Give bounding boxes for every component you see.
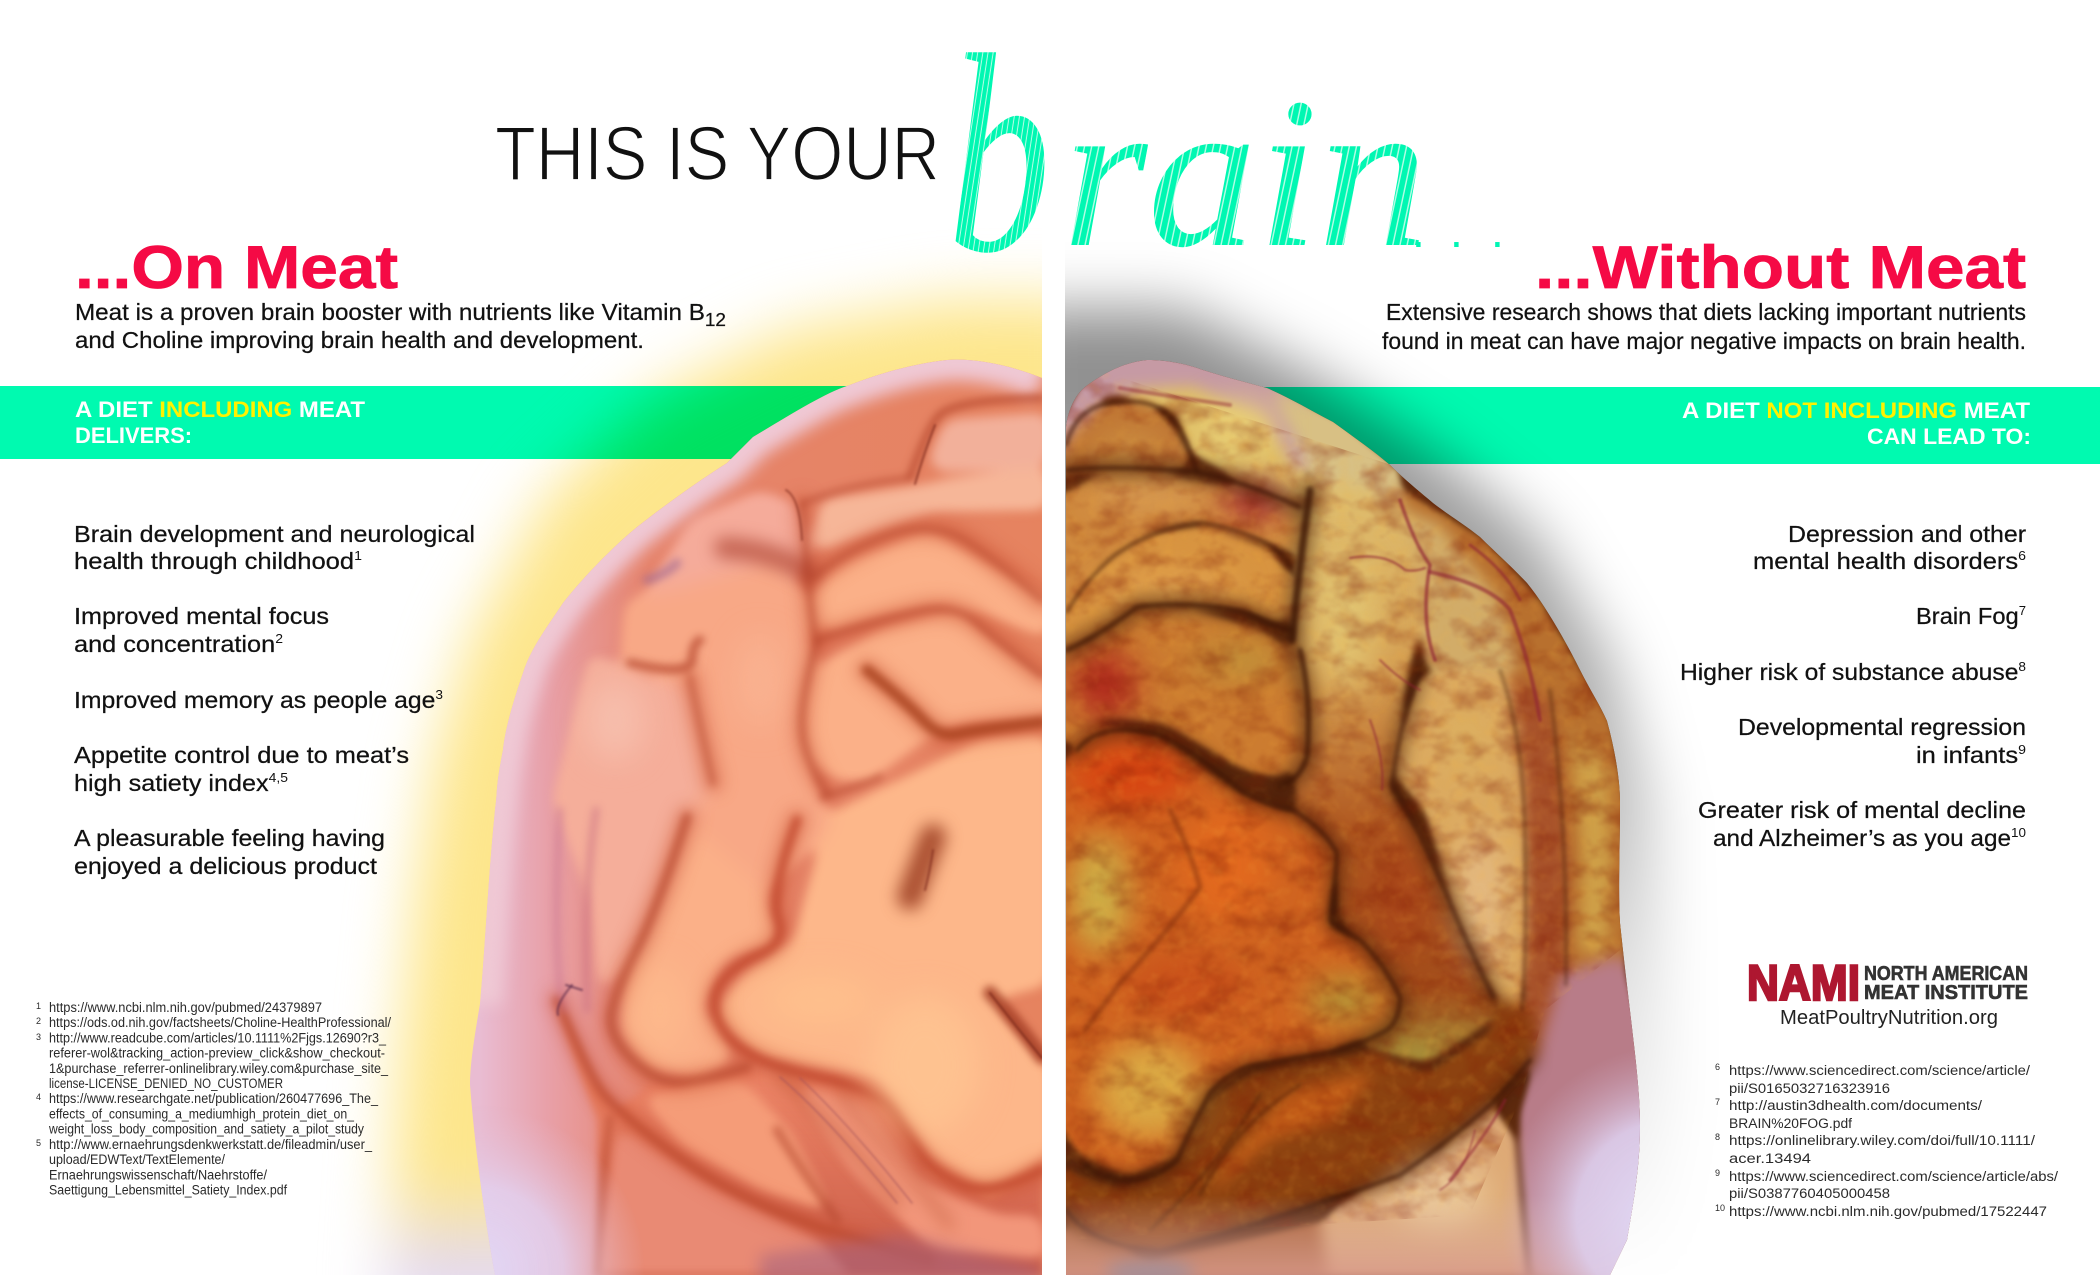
benefit: mental focus: Improved mental focus [74, 603, 329, 629]
footnotes: right: https://www.sciencedirect.com/science/article/abs/ [1729, 1169, 2058, 1184]
risk: substance abuse: Higher risk of substance abuse [1680, 659, 2003, 685]
thin creases [558, 425, 1042, 1203]
intro text: left: 12 [705, 310, 726, 330]
footnotes: left: Saettigung_Lebensmittel_Satiety_Index.pdf [49, 1182, 287, 1198]
benefit: appetite control: Appetite control due to meat’s [74, 742, 409, 768]
logo: north american meat institute: MEAT INSTITUTE [1864, 982, 2028, 1004]
risk: depression: mental health disorders [1753, 548, 1997, 574]
risk: developmental regression: Developmental regression [1738, 714, 2026, 740]
footnotes: left: 4 [36, 1092, 41, 1102]
logo: north american meat institute [1747, 955, 2028, 1011]
footnotes: right: pii/S0165032716323916 [1729, 1081, 1890, 1096]
footnotes: right [1715, 1062, 2058, 1219]
footnotes: left: https://www.researchgate.net/publication/260477696_The_ [49, 1091, 378, 1106]
footnotes: left: 2 [36, 1016, 41, 1026]
footnotes: right: 9 [1715, 1168, 1720, 1178]
risk: mental decline: Greater risk of mental decline [1698, 797, 2026, 823]
risk: brain fog: 7 [2019, 603, 2026, 618]
wide soft shading [725, 548, 950, 1225]
footnotes: left: 3 [36, 1032, 41, 1042]
risk: substance abuse: 8 [2018, 659, 2026, 674]
footnotes: right: http://austin3dhealth.com/documents/ [1729, 1098, 1982, 1113]
footnotes: left: http://www.ernaehrungsdenkwerkstatt.de/fileadmin/user_ [49, 1137, 372, 1152]
band heading: left: A DIET INCLUDING MEAT [75, 397, 365, 422]
mottled texture [1066, 360, 1641, 1260]
heading: on meat: ...On Meat [75, 234, 398, 301]
website: MeatPoultryNutrition.org [1780, 1006, 1998, 1029]
band heading: left [75, 397, 365, 448]
benefit: mental focus: 2 [275, 631, 283, 646]
benefit: pleasurable feeling: enjoyed a delicious product [74, 853, 377, 879]
gyri [552, 412, 1050, 1275]
title: script word brain: rain [1062, 53, 1428, 292]
intro text: right: Extensive research shows that diets lacking important nutrients [1386, 299, 2026, 325]
footnotes: left: license-LICENSE_DENIED_NO_CUSTOMER [49, 1076, 283, 1091]
lower folds [566, 1036, 1042, 1275]
logo: north american meat institute: NORTH AMERICAN [1864, 963, 2028, 985]
footnotes: left: weight_loss_body_composition_and_satiety_a_pilot_study [48, 1122, 364, 1136]
title: this is your: THIS IS YOUR [495, 111, 940, 197]
footnotes: left: 1&purchase_referrer-onlinelibrary.wiley.com&purchase_site_ [49, 1061, 388, 1076]
intro text: left: and Choline improving brain health and development. [75, 327, 644, 353]
central white divider [1042, 0, 1065, 1275]
footnotes: right: acer.13494 [1729, 1151, 1812, 1166]
benefits list [74, 521, 475, 879]
risk: mental decline: 10 [2011, 825, 2026, 840]
benefit: appetite control: 4,5 [269, 770, 288, 785]
heading: without meat: ...Without Meat [1535, 234, 2026, 301]
green band: left [0, 386, 900, 459]
risks list [1680, 521, 2026, 851]
veins [1120, 388, 1540, 1190]
risk: mental decline: and Alzheimer’s as you age [1713, 825, 2001, 851]
risk: developmental regression [1738, 714, 2026, 768]
benefit: appetite control [74, 742, 409, 796]
band heading: right [1682, 398, 2031, 449]
grey shadow behind unhealthy brain [1010, 310, 1665, 1275]
benefit: brain development: Brain development and neurological [74, 521, 475, 547]
footnotes: left: https://www.ncbi.nlm.nih.gov/pubmed/24379897 [49, 1000, 322, 1015]
title: ellipsis: ... [1412, 205, 1504, 257]
footnotes: left: http://www.readcube.com/articles/10.1111%2Fjgs.12690?r3_ [49, 1030, 386, 1046]
band heading: left: DELIVERS: [75, 423, 192, 448]
risk: developmental regression: in infants [1916, 742, 2010, 768]
band heading: right: CAN LEAD TO: [1867, 424, 2031, 449]
footnotes: right: BRAIN%20FOG.pdf [1729, 1116, 1852, 1131]
risk: developmental regression: 9 [2018, 742, 2026, 757]
benefit: brain development: 1 [354, 548, 362, 563]
benefit: pleasurable feeling [74, 825, 385, 879]
footnotes: left [36, 1000, 391, 1198]
benefit: brain development [74, 521, 475, 574]
benefit: mental focus [74, 603, 329, 657]
footnotes: left: 5 [36, 1138, 41, 1148]
lavender fade and bottom mauve [476, 1134, 637, 1275]
benefit: memory: Improved memory as people age [74, 687, 418, 713]
risk: depression: Depression and other [1788, 521, 2026, 547]
title: script word brain: b [948, 0, 1051, 312]
wide sulcus shading [1066, 468, 1530, 1252]
benefit: memory: 3 [435, 687, 443, 702]
footnotes: right: 8 [1715, 1132, 1720, 1142]
highlights [585, 634, 980, 1135]
intro text: right: found in meat can have major negative impacts on brain health. [1382, 328, 2026, 354]
footnotes: right: 10 [1715, 1203, 1725, 1213]
benefit: appetite control: high satiety index [74, 770, 256, 796]
footnotes: left: referer-wol&tracking_action-preview_click&show_checkout- [49, 1046, 385, 1060]
colour patches [1070, 401, 1502, 1231]
intro text: left: Meat is a proven brain booster with nutrients like Vitamin B [75, 299, 673, 325]
band heading: right: A DIET NOT INCLUDING MEAT [1682, 398, 2030, 423]
wide valley shading [557, 503, 1042, 1260]
footnotes: left: 1 [36, 1001, 41, 1011]
title [495, 0, 1504, 312]
footnotes: right: https://onlinelibrary.wiley.com/doi/full/10.1111/ [1729, 1133, 2035, 1148]
intro text: right [1382, 299, 2026, 354]
intro text: left [75, 299, 726, 353]
yellow glow behind healthy brain [385, 300, 1100, 1275]
footnotes: right: https://www.sciencedirect.com/science/article/ [1729, 1063, 2030, 1078]
sulci blurred [557, 398, 1042, 1275]
footnotes: left: upload/EDWText/TextElemente/ [49, 1152, 225, 1167]
lobes [1050, 350, 1650, 1275]
healthy brain illustration [460, 350, 1050, 1275]
logo: north american meat institute: NAMI [1747, 955, 1860, 1011]
title: script word brain [948, 0, 1428, 312]
risk: mental decline [1698, 797, 2026, 851]
lavender fade and bottom wash [1066, 1200, 1614, 1275]
green band: right [1200, 387, 2100, 464]
footnotes: left: effects_of_consuming_a_mediumhigh_protein_diet_on_ [49, 1106, 354, 1122]
footnotes: left: Ernaehrungswissenschaft/Naehrstoffe/ [49, 1168, 267, 1182]
benefit: brain development: health through childhood [74, 548, 331, 574]
benefit: pleasurable feeling: A pleasurable feeling having [74, 825, 385, 851]
footnotes: left: https://ods.od.nih.gov/factsheets/Choline-HealthProfessional/ [49, 1015, 391, 1030]
footnotes: right: 7 [1715, 1097, 1720, 1107]
dark sulci [1066, 402, 1566, 1252]
footnotes: right: https://www.ncbi.nlm.nih.gov/pubmed/17522447 [1729, 1204, 2047, 1219]
footnotes: right: 6 [1715, 1062, 1720, 1072]
footnotes: right: pii/S0387760405000458 [1729, 1186, 1890, 1201]
risk: brain fog: Brain Fog [1916, 603, 2018, 629]
risk: depression [1753, 521, 2026, 574]
pink outer rim [480, 360, 1042, 1004]
unhealthy brain illustration [1050, 350, 1660, 1275]
benefit: mental focus: and concentration [74, 631, 261, 657]
risk: depression: 6 [2018, 548, 2026, 563]
